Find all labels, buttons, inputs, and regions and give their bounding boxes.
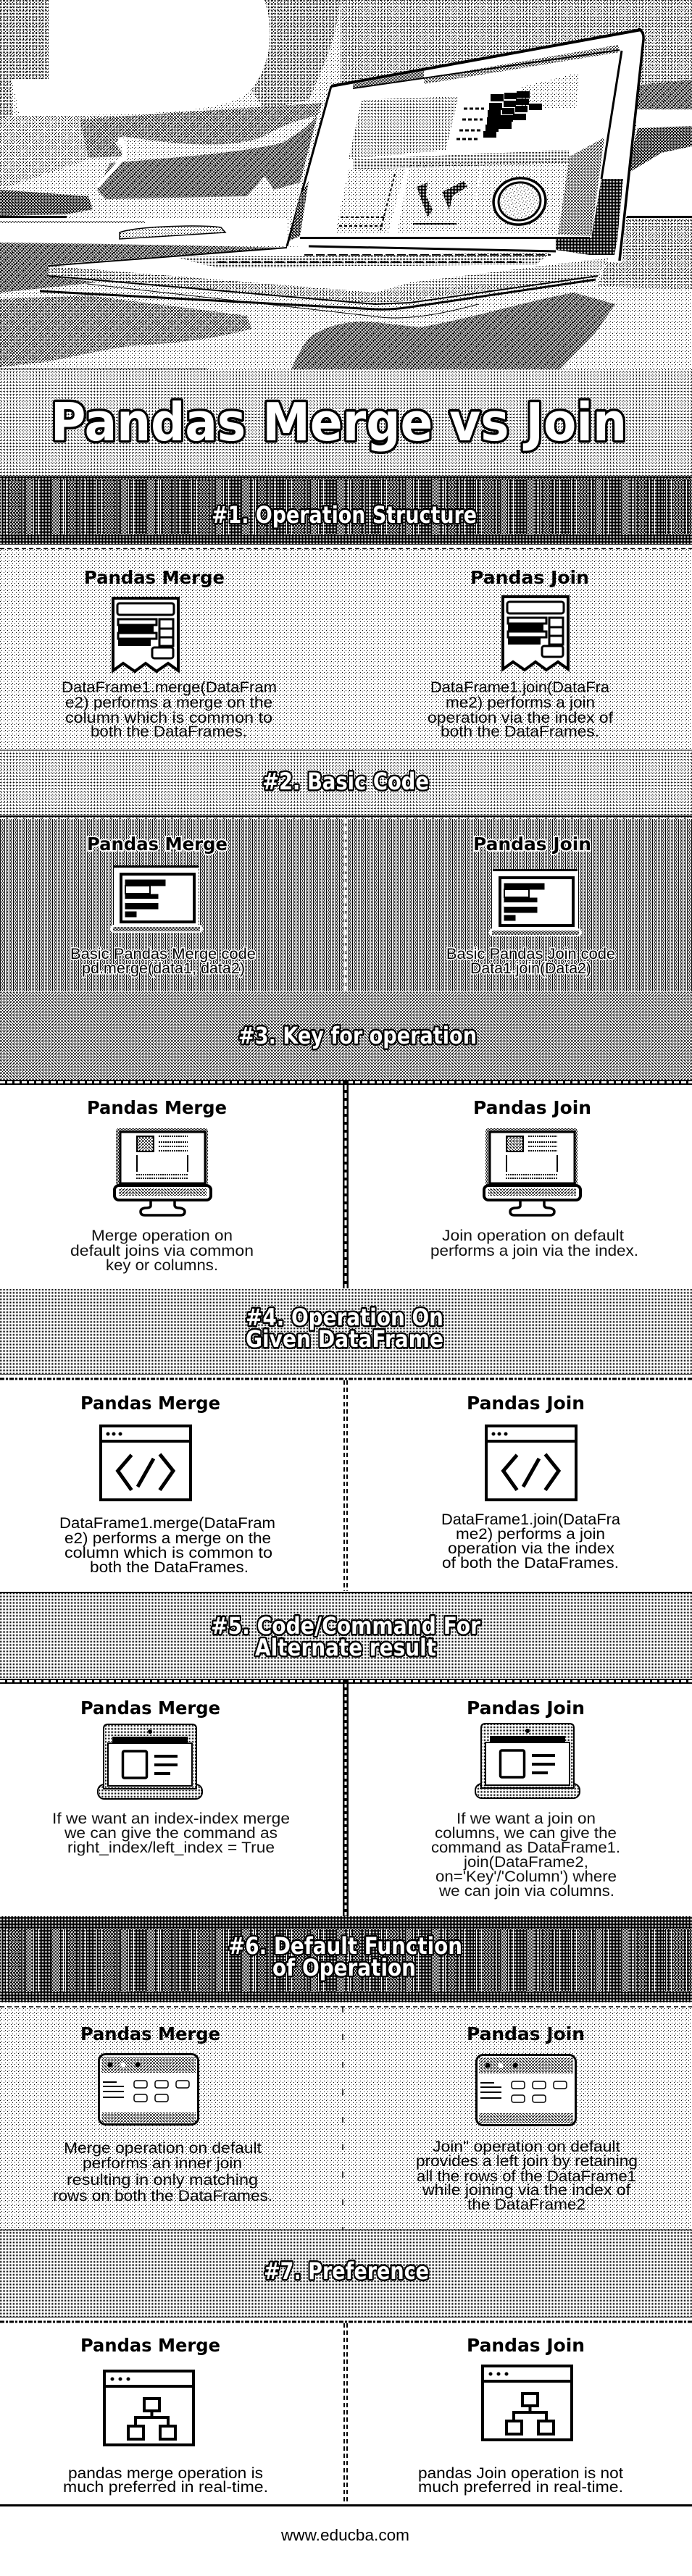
merge column — [62, 567, 277, 740]
merge column: key or columns. — [106, 1257, 218, 1274]
merge column: Pandas Merge — [80, 2335, 220, 2356]
section 6 heading band: of Operation — [272, 1954, 416, 1981]
join column — [431, 1698, 620, 1900]
merge column: performs an inner join — [83, 2155, 242, 2172]
join column: DataFrame1.join(DataFra — [430, 679, 609, 696]
merge column: Pandas Merge — [87, 834, 228, 855]
join column: Basic Pandas Join code — [446, 946, 615, 962]
section 2 panel: basic code — [0, 815, 692, 992]
join column: of both the DataFrames. — [442, 1555, 619, 1572]
join column: join(DataFrame2, — [463, 1854, 588, 1871]
merge column: Basic Pandas Merge code — [70, 946, 256, 962]
title banner — [0, 369, 692, 476]
merge column — [53, 2023, 272, 2204]
section 5 heading band — [0, 1592, 692, 1679]
join column: Pandas Join — [467, 2023, 585, 2044]
merge column: Pandas Merge — [80, 2023, 220, 2044]
merge column: both the DataFrames. — [91, 723, 247, 740]
merge column: Pandas Merge — [84, 567, 225, 588]
section 2 heading band — [0, 751, 692, 815]
merge column: both the DataFrames. — [90, 1559, 249, 1576]
merge column — [52, 1698, 290, 1856]
merge column: Merge operation on — [91, 1228, 233, 1244]
merge column — [70, 1097, 254, 1274]
section 6 heading band: #6. Default Function — [228, 1932, 462, 1960]
join column: we can join via columns. — [438, 1883, 614, 1900]
section 6 panel: default function of operation — [0, 2002, 692, 2230]
merge column: Pandas Merge — [87, 1097, 227, 1118]
merge column: e2) performs a merge on the — [65, 695, 272, 711]
join column: Pandas Join — [470, 567, 589, 588]
join column: me2) performs a join — [456, 1526, 605, 1543]
join column: Join" operation on default — [433, 2139, 620, 2155]
join column — [418, 2335, 623, 2496]
join column: pandas Join operation is not — [418, 2465, 623, 2482]
join column — [430, 1097, 638, 1259]
join column: much preferred in real-time. — [418, 2479, 623, 2496]
merge column: If we want an index-index merge — [52, 1811, 290, 1827]
join column — [416, 2023, 638, 2213]
join column: Join operation on default — [442, 1228, 624, 1244]
merge column — [70, 834, 256, 977]
footer: www.educba.com — [280, 2526, 409, 2544]
section 1 panel: operation structure — [0, 545, 692, 750]
join column: while joining via the index of — [422, 2182, 630, 2199]
section 6 heading band — [0, 1916, 692, 2002]
section 5 heading band: #5. Code/Command For — [211, 1612, 480, 1640]
section 4 heading band: Given DataFrame — [246, 1325, 443, 1353]
hero image: laptop on a desk — [0, 0, 692, 369]
merge column: rows on both the DataFrames. — [53, 2188, 272, 2204]
section 3 heading band: #3. Key for operation — [238, 1022, 477, 1049]
section 4 panel: operation on given dataframe — [0, 1374, 692, 1591]
join column — [428, 567, 613, 740]
join column: the DataFrame2 — [467, 2197, 585, 2213]
title banner: Pandas Merge vs Join — [51, 392, 627, 453]
join column: Data1.join(Data2) — [470, 960, 591, 977]
join column: operation via the index — [448, 1540, 615, 1557]
merge column: pandas merge operation is — [68, 2465, 263, 2482]
merge column: DataFrame1.merge(DataFram — [59, 1515, 275, 1532]
join column: on='Key'/'Column') where — [435, 1868, 617, 1885]
join column: Pandas Join — [473, 1097, 591, 1118]
join column: performs a join via the index. — [430, 1243, 638, 1259]
section 5 panel: code or command for alternate result — [0, 1679, 692, 1916]
join column: Pandas Join — [467, 1698, 585, 1719]
section 7 panel: preference — [0, 2317, 692, 2505]
merge column: Pandas Merge — [80, 1393, 220, 1414]
section 2 heading band: #2. Basic Code — [262, 768, 429, 795]
join column: Pandas Join — [467, 2335, 585, 2356]
join column: all the rows of the DataFrame1 — [417, 2168, 636, 2185]
merge column: e2) performs a merge on the — [64, 1530, 271, 1547]
join column: DataFrame1.join(DataFra — [441, 1511, 620, 1528]
merge column: right_index/left_index = True — [67, 1839, 275, 1856]
footer — [0, 2504, 692, 2544]
section 5 heading band: Alternate result — [255, 1634, 436, 1661]
merge column: pd.merge(data1, data2) — [82, 960, 245, 977]
merge column: resulting in only matching — [67, 2172, 258, 2189]
join column: If we want a join on — [457, 1811, 596, 1827]
merge column: we can give the command as — [64, 1825, 278, 1842]
merge column: column which is common to — [65, 710, 272, 726]
join column — [441, 1393, 620, 1572]
section 3 heading band — [0, 992, 692, 1080]
section 4 heading band: #4. Operation On — [246, 1304, 443, 1331]
merge column: DataFrame1.merge(DataFram — [62, 679, 277, 696]
section 1 heading band: #1. Operation Structure — [212, 501, 477, 529]
section 1 heading band — [0, 476, 692, 545]
join column: Pandas Join — [467, 1393, 585, 1414]
section 7 heading band: #7. Preference — [264, 2257, 429, 2285]
join column — [446, 834, 615, 977]
merge column: much preferred in real-time. — [63, 2479, 268, 2496]
section 7 heading band — [0, 2231, 692, 2317]
merge column: Merge operation on default — [64, 2140, 262, 2157]
join column: columns, we can give the — [435, 1825, 617, 1842]
join column: command as DataFrame1. — [431, 1839, 620, 1856]
merge column — [63, 2335, 268, 2496]
merge column: default joins via common — [70, 1243, 254, 1259]
join column: me2) performs a join — [446, 695, 595, 711]
section 3 panel: key for operation — [0, 1080, 692, 1288]
join column: both the DataFrames. — [441, 723, 599, 740]
merge column: column which is common to — [64, 1545, 272, 1561]
merge column: Pandas Merge — [80, 1698, 220, 1719]
merge column — [59, 1393, 275, 1576]
section 4 heading band — [0, 1288, 692, 1374]
join column: operation via the index of — [428, 710, 613, 726]
join column: Pandas Join — [473, 834, 591, 855]
join column: provides a left join by retaining — [416, 2153, 638, 2170]
